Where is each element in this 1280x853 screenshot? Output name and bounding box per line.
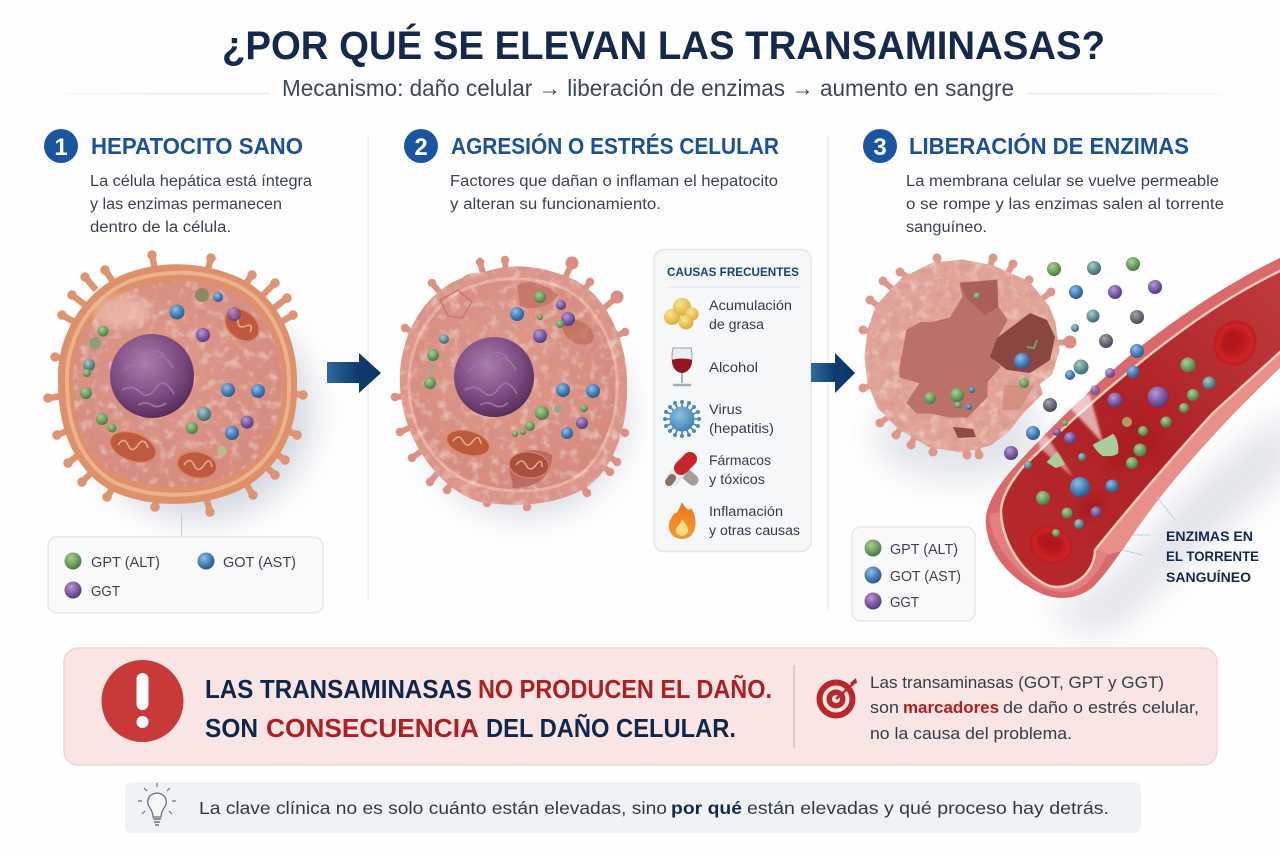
text: clinical key: están elevadas y qué proceso hay detrás. xyxy=(747,798,1109,818)
panel: clinical key note xyxy=(125,782,1141,833)
panel: key message callout xyxy=(64,648,1217,765)
label: fat accumulation: Acumulación xyxy=(709,298,792,313)
panel: step 3 heading: LIBERACIÓN DE ENZIMAS xyxy=(909,132,1189,159)
panel: step 3 heading xyxy=(863,129,1189,163)
icon: fat droplets xyxy=(664,298,698,330)
icon: red blood cell lower xyxy=(1024,520,1078,570)
label: inflammation: Inflamación xyxy=(709,504,783,519)
arrow: step 1 to step 2 xyxy=(327,353,381,393)
label: virus: (hepatitis) xyxy=(709,421,774,436)
text: main statement: NO PRODUCEN EL DAÑO. xyxy=(478,674,772,704)
icon: target xyxy=(816,678,857,718)
label: drugs and toxins: Fármacos xyxy=(709,453,771,468)
label: enzymes in the bloodstream: SANGUÍNEO xyxy=(1166,570,1251,585)
text: markers explanation: Las transaminasas (GOT, GPT y GGT) xyxy=(870,674,1164,692)
text block: step 3 description: sanguíneo. xyxy=(906,219,987,236)
heading: causas frecuentes: CAUSAS FRECUENTES xyxy=(667,265,799,279)
text: main statement: SON xyxy=(205,713,258,743)
icon: exclamation xyxy=(102,660,184,742)
label: alcohol: Alcohol xyxy=(709,360,758,375)
legend: step 1 enzymes: GPT (ALT) xyxy=(91,555,160,571)
text: clinical key: La clave clínica no es solo cuánto están elevadas, sino xyxy=(199,798,667,818)
legend: step 3 enzymes: GGT xyxy=(890,595,919,611)
text block: step 2 description: y alteran su funcionamiento. xyxy=(450,196,661,213)
panel: frequent causes xyxy=(654,250,811,552)
title: ¿POR QUÉ SE ELEVAN LAS TRANSAMINASAS? xyxy=(222,23,1105,68)
illustration: blood vessel xyxy=(986,253,1280,632)
illustration: damaged hepatocyte xyxy=(395,260,627,515)
text block: step 1 description: La célula hepática está íntegra xyxy=(90,173,312,190)
label: enzymes in the bloodstream: EL TORRENTE xyxy=(1166,549,1259,564)
panel: step 1 heading: HEPATOCITO SANO xyxy=(91,133,303,159)
text block: step 2 description: Factores que dañan o inflaman el hepatocito xyxy=(450,173,778,190)
icon: virus xyxy=(665,402,699,436)
legend: step 3 enzymes: GPT (ALT) xyxy=(890,542,958,558)
label: fat accumulation: de grasa xyxy=(709,317,765,332)
icon: wine glass xyxy=(672,348,692,385)
text: markers explanation: marcadores xyxy=(903,699,999,717)
text: clinical key: por qué xyxy=(671,798,742,818)
panel: step 2 heading xyxy=(404,129,779,163)
label: virus: Virus xyxy=(709,402,742,417)
text: main statement: LAS TRANSAMINASAS xyxy=(205,674,472,704)
legend: step 1 enzymes: GOT (AST) xyxy=(223,555,296,571)
legend: step 1 enzymes xyxy=(48,537,323,613)
free enzymes released xyxy=(1004,257,1162,460)
text: markers explanation: son xyxy=(870,699,899,717)
legend: step 3 enzymes: GOT (AST) xyxy=(890,569,961,585)
label: drugs and toxins xyxy=(709,453,771,487)
text: main statement xyxy=(205,674,772,743)
label: enzymes in the bloodstream xyxy=(1166,529,1259,585)
icon: capsules xyxy=(669,459,693,482)
icon: light bulb xyxy=(138,783,176,825)
legend: step 3 enzymes xyxy=(852,527,975,621)
icon: red blood cell upper xyxy=(1205,313,1265,373)
text: markers explanation xyxy=(870,674,1199,743)
text block: step 3 description: La membrana celular se vuelve permeable xyxy=(906,173,1219,190)
icon: flame xyxy=(669,502,696,539)
label: virus xyxy=(709,402,774,436)
text: main statement: DEL DAÑO CELULAR. xyxy=(486,713,736,743)
text block: step 3 description xyxy=(906,173,1224,236)
label: fat accumulation xyxy=(709,298,792,332)
text: markers explanation: no la causa del problema. xyxy=(870,725,1072,743)
panel: step 1 heading: 1 xyxy=(54,134,68,161)
label: drugs and toxins: y tóxicos xyxy=(709,472,765,487)
text: markers explanation: de daño o estrés celular, xyxy=(1003,699,1199,717)
text block: step 1 description: y las enzimas permanecen xyxy=(90,196,282,213)
panel: step 2 heading: 2 xyxy=(414,134,428,161)
text: main statement: CONSECUENCIA xyxy=(266,713,479,743)
legend: step 1 enzymes: GGT xyxy=(91,584,120,600)
text: clinical key xyxy=(199,798,1109,818)
arrow: step 2 to step 3 xyxy=(811,353,855,393)
panel: step 1 heading xyxy=(44,129,303,163)
text block: step 1 description xyxy=(90,173,312,236)
text block: step 3 description: o se rompe y las enzimas salen al torrente xyxy=(906,196,1224,213)
label: enzymes in the bloodstream: ENZIMAS EN xyxy=(1166,529,1253,544)
illustration: ruptured hepatocyte xyxy=(863,258,1076,480)
panel: step 3 heading: 3 xyxy=(873,134,887,161)
text block: step 2 description xyxy=(450,173,778,213)
illustration: healthy hepatocyte xyxy=(48,255,312,520)
label: inflammation: y otras causas xyxy=(709,523,800,538)
subtitle: Mecanismo: daño celular → liberación de enzimas → aumento en sangre xyxy=(282,75,1014,101)
panel: step 2 heading: AGRESIÓN O ESTRÉS CELULAR xyxy=(451,132,779,159)
text block: step 1 description: dentro de la célula. xyxy=(90,219,231,236)
label: inflammation xyxy=(709,504,800,538)
